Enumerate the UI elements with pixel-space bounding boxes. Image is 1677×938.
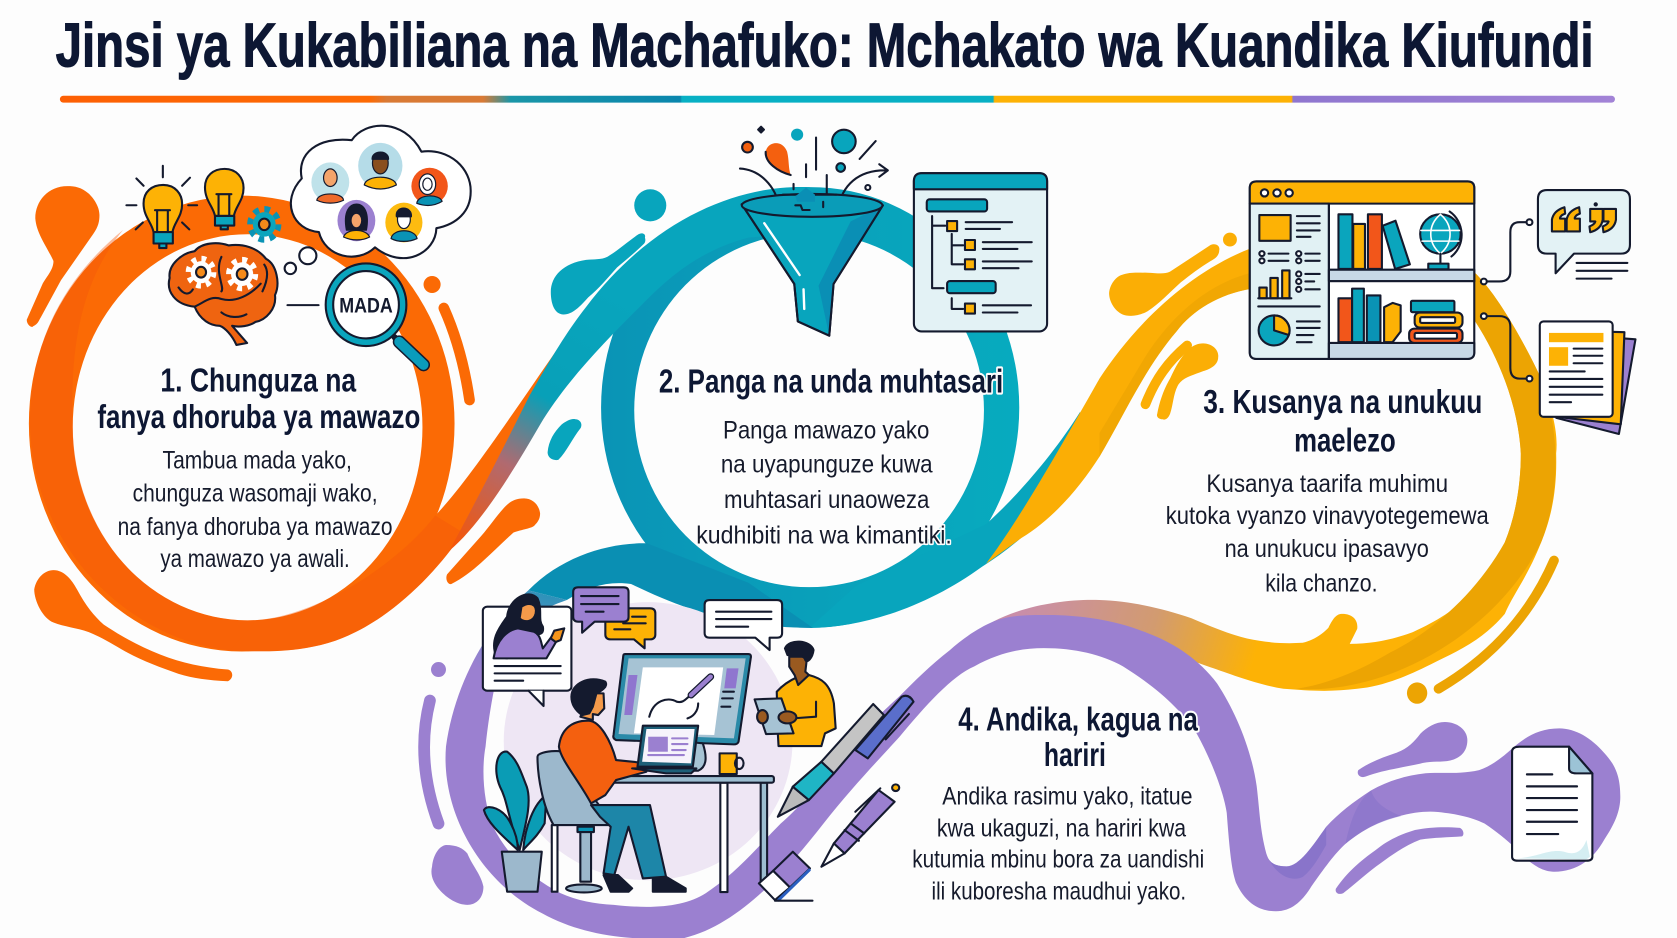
body text: step 1 xyxy=(118,446,393,573)
heading: step 1 xyxy=(97,362,420,436)
body text: step 3 xyxy=(1166,470,1489,597)
icon: outline document xyxy=(914,173,1047,331)
panel: step 3 xyxy=(1166,181,1635,597)
body text: step 2: na uyapunguze kuwa xyxy=(721,451,933,479)
icon: purple chat bubble xyxy=(573,587,629,633)
body text: step 3: kutoka vyanzo vinavyotegemewa xyxy=(1166,502,1489,530)
icon: laptop xyxy=(632,726,698,773)
avatar 5 xyxy=(385,203,422,242)
ribbon: purple wave xyxy=(446,590,1620,938)
heading: step 3 xyxy=(1203,384,1482,459)
avatar 2 xyxy=(358,143,402,189)
lilac backdrop disc xyxy=(504,602,793,880)
icon: idea particles and arrows xyxy=(740,127,888,209)
body text: step 4: Andika rasimu yako, itatue xyxy=(942,782,1193,810)
body text: step 4: kwa ukaguzi, na hariri kwa xyxy=(937,814,1186,842)
icon group: library window, quote, papers xyxy=(1250,181,1635,434)
icon: quote bubble xyxy=(1538,190,1630,279)
heading: step 4: 4. Andika, kagua na xyxy=(958,702,1198,739)
heading: step 3: maelezo xyxy=(1294,422,1396,459)
heading: step 1: fanya dhoruba ya mawazo xyxy=(97,399,420,436)
icon: light bulb with rays xyxy=(126,166,197,248)
splashes: purple xyxy=(424,662,1467,905)
heading: step 2: 2. Panga na unda muhtasari xyxy=(659,364,1003,401)
body text: step 3: na unukucu ipasavyo xyxy=(1225,535,1429,563)
icon: chair xyxy=(537,751,623,892)
connector lines xyxy=(1481,219,1532,381)
icon: second light bulb xyxy=(205,169,244,229)
icon: desk monitor xyxy=(613,654,751,771)
heading: step 3: 3. Kusanya na unukuu xyxy=(1203,384,1482,421)
panel: step 1 xyxy=(97,126,471,573)
avatar 3 xyxy=(411,168,448,205)
heading: step 1: 1. Chunguza na xyxy=(160,362,357,399)
body text: step 2: muhtasari unaoweza xyxy=(724,486,929,514)
heading: step 4 xyxy=(958,702,1198,774)
icon: white chat bubble xyxy=(705,600,782,650)
heading: step 4: hariri xyxy=(1044,737,1106,774)
panel: step 2 xyxy=(659,127,1047,549)
body text: step 2: kudhibiti na wa kimantiki. xyxy=(696,521,952,549)
icon: standing colleague with tablet xyxy=(755,642,836,746)
icon: seated writer xyxy=(559,679,686,892)
body text: step 3: Kusanya taarifa muhimu xyxy=(1206,470,1448,498)
icon: funnel xyxy=(742,184,883,336)
title rule: four-colour bar xyxy=(60,96,1615,103)
icon: desk and mug xyxy=(605,753,774,892)
body text: step 1: Tambua mada yako, xyxy=(163,446,352,474)
icon: small pen xyxy=(821,784,899,867)
icon: yellow chat bubble xyxy=(605,608,655,648)
ribbon: orange ring xyxy=(29,187,810,651)
connector line xyxy=(287,304,319,306)
icon: stacked papers xyxy=(1540,321,1635,434)
ribbon: yellow ring xyxy=(986,248,1557,691)
avatar 4 xyxy=(337,200,375,241)
body text: step 1: na fanya dhoruba ya mawazo xyxy=(118,513,393,541)
body text: step 1: chunguza wasomaji wako, xyxy=(133,480,378,508)
icon: eraser xyxy=(759,852,812,901)
icon: woman in speech card xyxy=(483,594,571,706)
icon: thought cloud with avatars xyxy=(285,126,471,274)
icon group: funnel and outline document xyxy=(740,127,1047,336)
splashes: teal xyxy=(548,189,666,460)
body text: step 4: kutumia mbinu bora za uandishi xyxy=(912,845,1204,873)
panel: step 4 xyxy=(483,587,1592,905)
body text: step 1: ya mawazo ya awali. xyxy=(160,545,350,573)
body text: step 2: Panga mawazo yako xyxy=(723,417,929,445)
icon: large pen xyxy=(778,696,914,817)
icon: final document xyxy=(1512,747,1592,861)
icon group: light bulbs, gear, brain, cloud, magnifier xyxy=(126,126,471,365)
icon: plant xyxy=(484,752,546,892)
icon: magnifier with MADA label xyxy=(326,263,424,365)
icon: gear xyxy=(250,209,279,240)
ribbon: teal ring xyxy=(528,187,1080,628)
body text: step 4: ili kuboresha maudhui yako. xyxy=(932,877,1186,905)
icon: magnifier with MADA label: MADA xyxy=(339,294,393,318)
icon: brain xyxy=(169,243,277,345)
illustration: writer at desk with collaborators xyxy=(483,587,914,901)
body text: step 3: kila chanzo. xyxy=(1265,569,1378,597)
body text: step 4 xyxy=(912,782,1204,905)
body text: step 2 xyxy=(696,417,952,549)
icon: library browser window xyxy=(1250,181,1474,359)
splashes: yellow xyxy=(1109,233,1554,704)
splashes: orange xyxy=(27,186,540,681)
avatar 1 xyxy=(311,162,349,203)
